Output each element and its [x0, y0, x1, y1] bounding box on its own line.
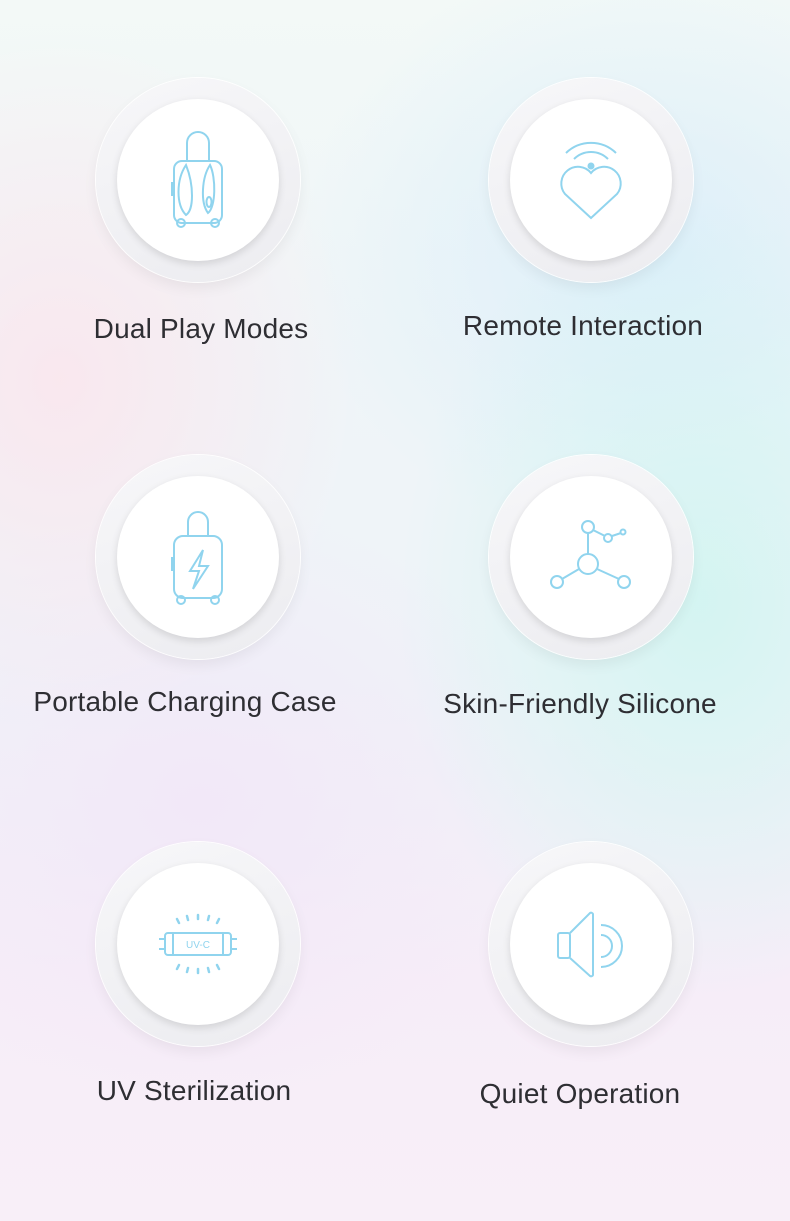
label: quiet operation: Quiet Operation: [480, 1078, 680, 1109]
label: uv sterilization: UV Sterilization: [97, 1075, 291, 1106]
icon: remote interaction: [488, 77, 694, 286]
icon: uv sterilization: [95, 841, 301, 1050]
icon: dual play modes: [95, 77, 301, 286]
label: dual play modes: Dual Play Modes: [94, 313, 308, 344]
icon: skin-friendly silicone: [488, 454, 694, 663]
icon: quiet operation: [488, 841, 694, 1050]
label: portable charging case: Portable Charging Case: [33, 686, 337, 717]
icon: uv sterilization: UV-C: [186, 940, 210, 951]
label: remote interaction: Remote Interaction: [463, 310, 703, 341]
label: skin-friendly silicone: Skin-Friendly Silicone: [443, 688, 717, 719]
icon: portable charging case: [95, 454, 301, 663]
